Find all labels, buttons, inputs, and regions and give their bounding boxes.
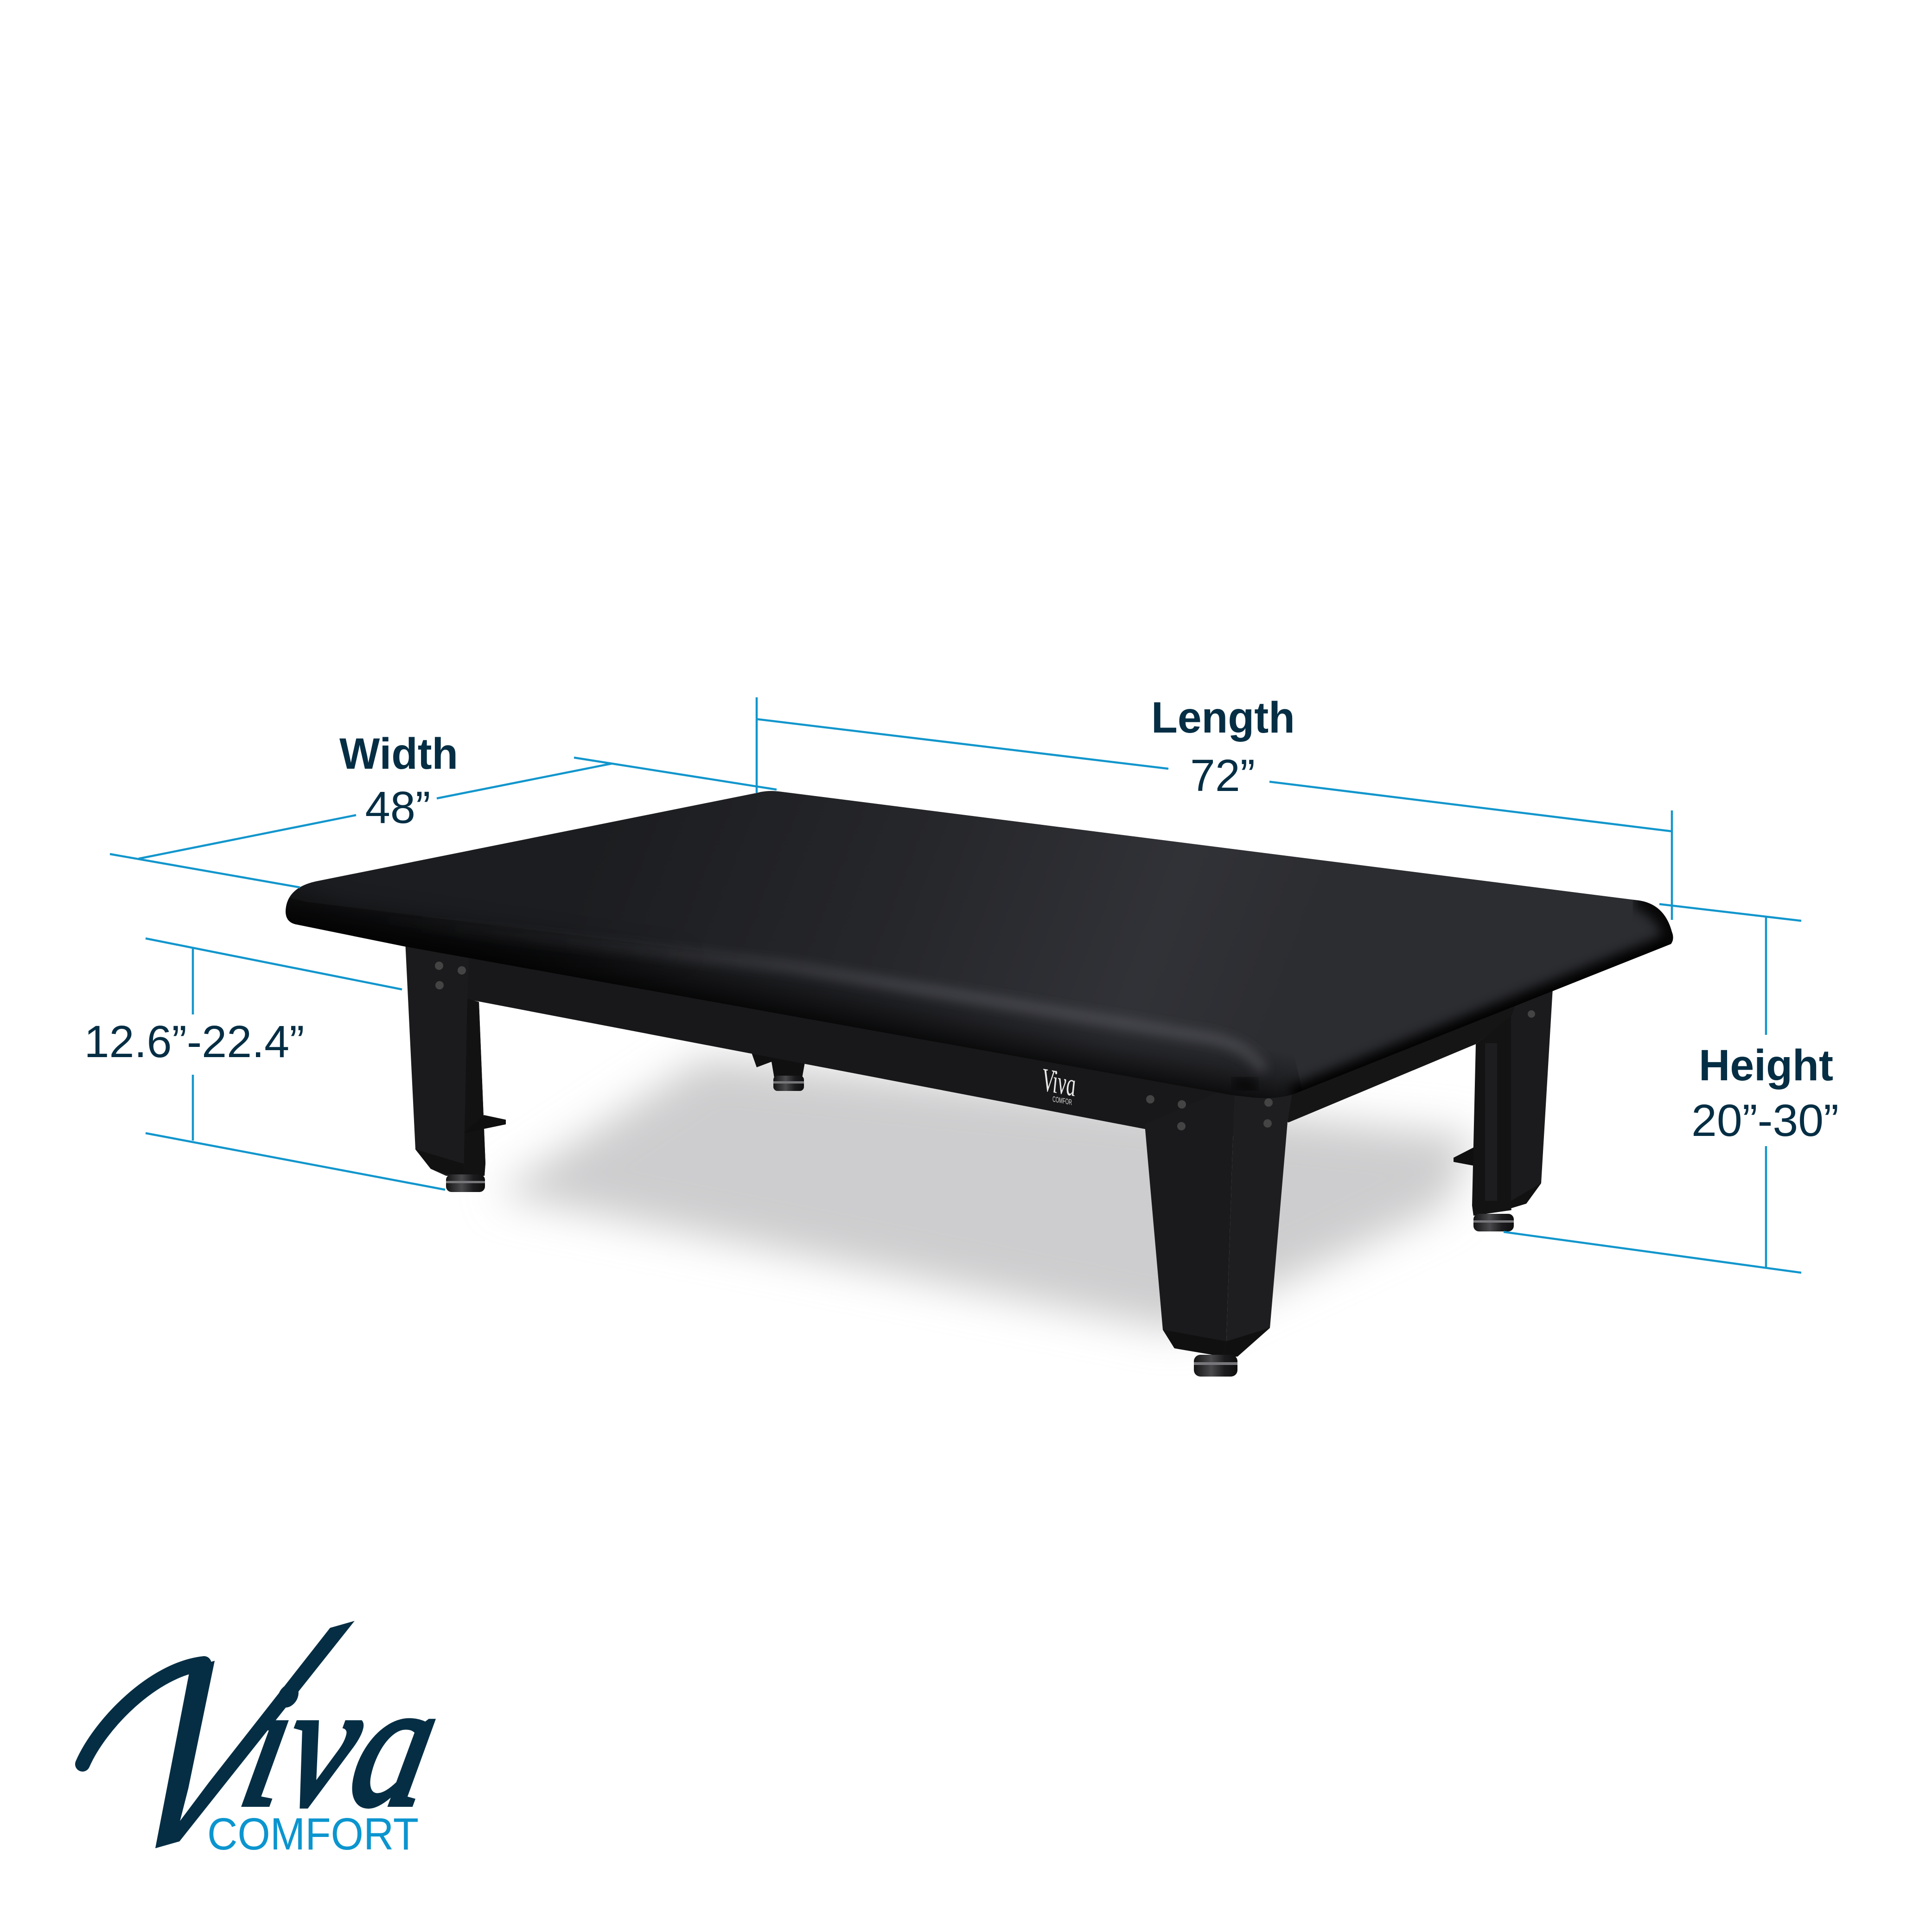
floor shadow: [496, 1057, 1474, 1331]
brand logo: [51, 1557, 455, 1931]
leg height label: 12.6”-22.4”: [84, 1016, 304, 1067]
width label: [339, 729, 458, 833]
logo swash: [83, 1664, 204, 1764]
right apron: [1229, 1004, 1516, 1122]
front apron: [464, 948, 1238, 1136]
length label: [1151, 693, 1295, 801]
dimension: leg height lines: [146, 938, 445, 1190]
dimension: width lines: [110, 758, 777, 887]
apron logo: Viva: [1042, 1060, 1076, 1104]
length label: Length: [1151, 693, 1295, 742]
height label: Height: [1699, 1041, 1833, 1090]
dimension: length lines: [757, 697, 1672, 920]
infographic canvas: [75, 697, 1837, 1850]
width label: 48”: [365, 782, 430, 833]
height label: 20”-30”: [1691, 1095, 1839, 1146]
length label: 72”: [1190, 750, 1255, 801]
padded table top: [278, 791, 1676, 1113]
table illustration: [278, 791, 1676, 1377]
logo subtitle: COMFORT: [207, 1809, 419, 1859]
dimension: height lines: [1504, 904, 1801, 1273]
apron logo: [1042, 1060, 1076, 1108]
apron logo: COMFOR: [1052, 1094, 1072, 1107]
logo wordmark: V: [51, 1557, 390, 1931]
width label: Width: [339, 729, 458, 778]
back middle foot: [751, 1052, 806, 1091]
front right leg: [1145, 1085, 1294, 1377]
left leg: [405, 941, 506, 1192]
height label: [1691, 1041, 1839, 1146]
logo wordmark: iva: [227, 1646, 455, 1843]
back right leg: [1454, 988, 1553, 1231]
